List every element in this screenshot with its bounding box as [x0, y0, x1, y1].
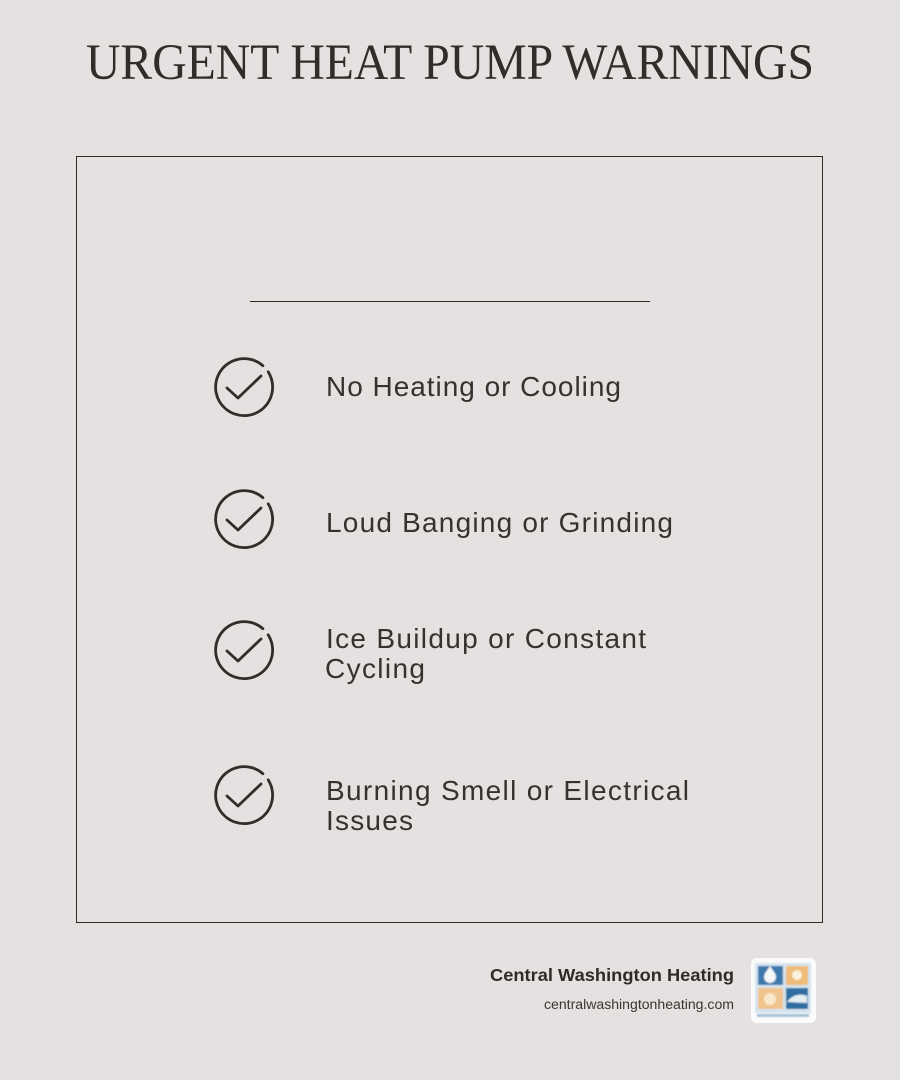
warning item: no heating or cooling: [216, 359, 621, 416]
warning item: no heating or cooling: No Heating or Cooling: [326, 371, 621, 402]
warning item: ice buildup or constant cycling: Cycling: [325, 653, 425, 684]
warning item: ice buildup or constant cycling: Ice Buildup or Constant: [326, 623, 646, 654]
warning item: burning smell or electrical issues: Issues: [326, 805, 413, 836]
footer brand name: Central Washington Heating: [490, 965, 734, 985]
warning item: loud banging or grinding: Loud Banging or Grinding: [326, 507, 673, 538]
title: URGENT HEAT PUMP WARNINGS: [86, 35, 814, 91]
icon: check circle: [216, 359, 273, 416]
warning item: burning smell or electrical issues: Burning Smell or Electrical: [326, 775, 689, 806]
warning item: burning smell or electrical issues: [216, 767, 689, 836]
footer website: centralwashingtonheating.com: [544, 997, 734, 1012]
icon: check circle: [216, 767, 273, 824]
warning item: loud banging or grinding: [216, 491, 673, 548]
warning item: ice buildup or constant cycling: [216, 622, 646, 684]
icon: check circle: [216, 622, 273, 679]
icon: check circle: [216, 491, 273, 548]
icon: company logo: [751, 958, 816, 1023]
panel: warnings: [76, 156, 822, 922]
